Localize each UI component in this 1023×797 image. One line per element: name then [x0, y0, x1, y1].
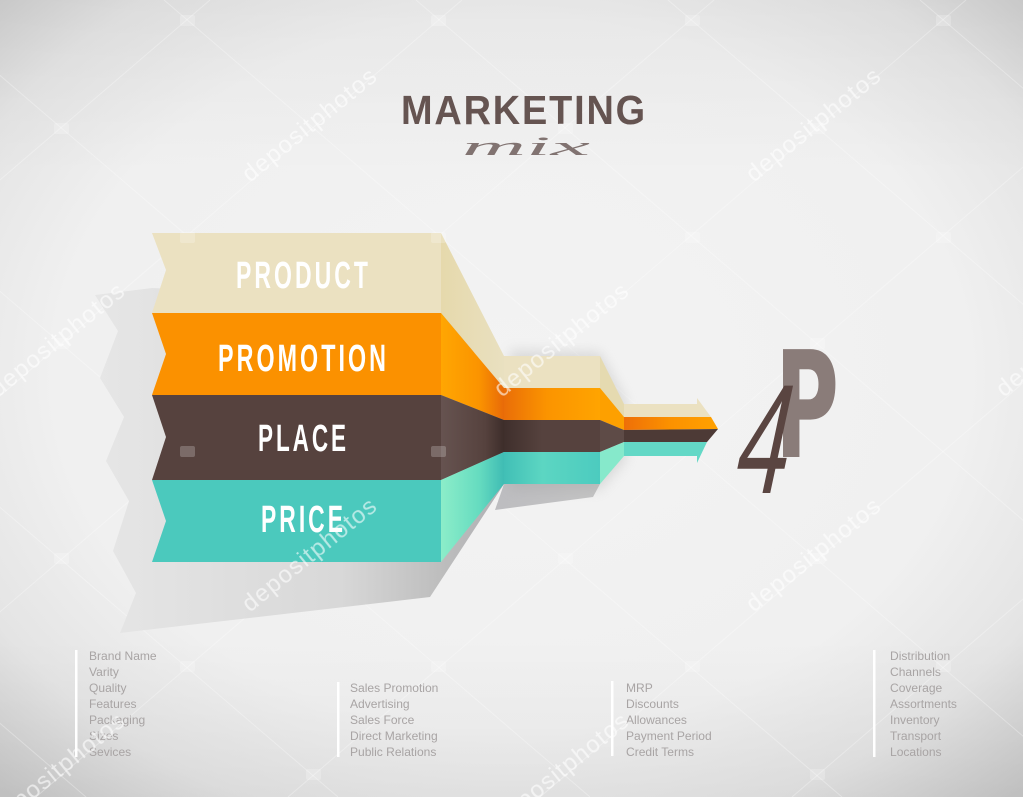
list column: product: Features	[89, 697, 137, 711]
label: price: PRICE	[261, 499, 346, 541]
list column: promotion: Sales Promotion	[350, 681, 438, 695]
letter P: P	[775, 320, 839, 492]
label: promotion: PROMOTION	[218, 338, 389, 380]
band: price	[152, 442, 707, 562]
list column: price: Credit Terms	[626, 745, 694, 759]
list column: place: Assortments	[890, 697, 957, 711]
list column: place: Inventory	[890, 713, 940, 727]
list column: product	[75, 649, 157, 759]
subtitle: mix: mix	[462, 132, 592, 161]
title	[401, 87, 647, 161]
watermarks: depositphotos	[237, 493, 382, 618]
band: place	[152, 395, 718, 480]
band: product	[152, 233, 711, 417]
list column: product: Brand Name	[89, 649, 157, 663]
list column: product: Packaging	[89, 713, 145, 727]
band: promotion	[152, 313, 718, 430]
list column: price: MRP	[626, 681, 653, 695]
title text: marketing: MARKETING	[401, 87, 647, 133]
logo: 4P	[723, 320, 839, 527]
list column: price	[611, 681, 712, 759]
list column: place: Coverage	[890, 681, 943, 695]
list column: promotion: Advertising	[350, 697, 410, 711]
list column: promotion: Sales Force	[350, 713, 415, 727]
funnel arrow	[152, 233, 718, 562]
list column: place	[873, 649, 957, 759]
label: place: PLACE	[258, 418, 349, 460]
list column: place: Transport	[890, 729, 942, 743]
watermarks: depositphotos	[741, 63, 886, 188]
list column: product: Sizes	[89, 729, 118, 743]
list column: product: Sevices	[89, 745, 131, 759]
label: product: PRODUCT	[236, 255, 371, 297]
list column: place: Distribution	[890, 649, 950, 663]
cast shadow	[95, 288, 626, 633]
watermarks: depositphotos	[237, 63, 382, 188]
list column: promotion	[337, 681, 438, 759]
watermarks: depositphotos	[489, 278, 634, 403]
numeral 4: 4	[723, 353, 812, 527]
list column: place: Channels	[890, 665, 941, 679]
list column: price: Discounts	[626, 697, 679, 711]
list column: price: Allowances	[626, 713, 687, 727]
watermarks: depositphotos	[741, 493, 886, 618]
list column: promotion: Public Relations	[350, 745, 436, 759]
list column: price: Payment Period	[626, 729, 712, 743]
list column: product: Quality	[89, 681, 126, 695]
list column: product: Varity	[89, 665, 119, 679]
list column: promotion: Direct Marketing	[350, 729, 438, 743]
list column: place: Locations	[890, 745, 942, 759]
